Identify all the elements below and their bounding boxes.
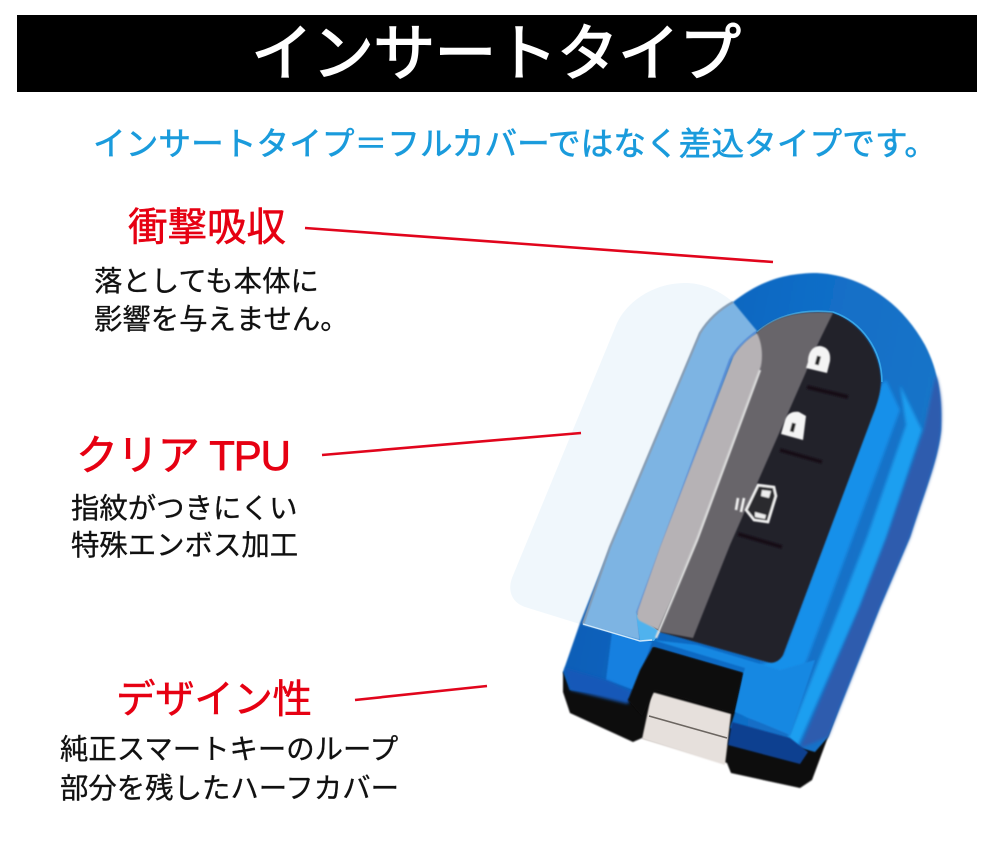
case right band: dark outer edge <box>800 375 941 748</box>
film outer edge <box>583 302 733 624</box>
clear film overhang <box>510 283 733 640</box>
title banner: インサートタイプ <box>251 20 741 89</box>
text: design description: 純正スマートキーのループ <box>60 734 398 766</box>
silver loop <box>642 692 731 765</box>
callout: clear TPU <box>71 432 298 562</box>
lower left blue bright area <box>606 632 652 690</box>
icon: sliding door <box>736 485 776 522</box>
heading: clear TPU: クリア TPU <box>76 432 291 479</box>
loop groove <box>649 716 727 738</box>
blue case body <box>563 273 941 752</box>
text: impact absorption description: 影響を与えません。 <box>94 304 349 336</box>
icon: lock <box>806 346 830 373</box>
black loop slot <box>628 647 743 716</box>
arrow line: clear TPU <box>322 433 581 455</box>
arrow line: impact absorption <box>305 228 773 262</box>
case right band: bright inner <box>743 380 900 726</box>
text: design description: 部分を残したハーフカバー <box>60 773 399 805</box>
film over lower blue <box>636 614 660 641</box>
lower blue plate <box>653 640 815 735</box>
film edge highlight <box>656 370 760 638</box>
key black base <box>563 590 880 788</box>
film bottom edge <box>583 624 652 641</box>
subtitle: インサートタイプ＝フルカバーではなく差込タイプです。 <box>93 125 937 162</box>
key button panel <box>640 313 881 663</box>
heading: impact absorption: 衝撃吸収 <box>128 206 286 250</box>
lower right shade <box>728 722 808 764</box>
film over panel: light gray <box>637 333 762 630</box>
heading: design: デザイン性 <box>116 678 312 722</box>
smart key illustration <box>510 273 941 788</box>
text: design description <box>60 734 399 805</box>
case right band: bright outer <box>788 385 922 748</box>
text: clear TPU description <box>71 493 298 562</box>
text: clear TPU description: 特殊エンボス加工 <box>71 530 298 562</box>
panel cyan inner line <box>757 311 882 382</box>
callout: design <box>60 678 399 805</box>
callout: impact absorption <box>94 206 349 336</box>
film over panel: dark gray <box>660 312 833 638</box>
icon: unlock <box>781 412 806 440</box>
text: impact absorption description: 落としても本体に <box>94 266 319 298</box>
arrow line: design <box>355 686 487 700</box>
lower left shade <box>565 668 632 704</box>
text: clear TPU description: 指紋がつきにくい <box>71 493 298 525</box>
button dividers <box>738 387 848 547</box>
film inner edge line <box>637 332 756 613</box>
text: impact absorption description <box>94 266 349 336</box>
film over rim <box>583 302 757 640</box>
title banner <box>17 15 977 92</box>
